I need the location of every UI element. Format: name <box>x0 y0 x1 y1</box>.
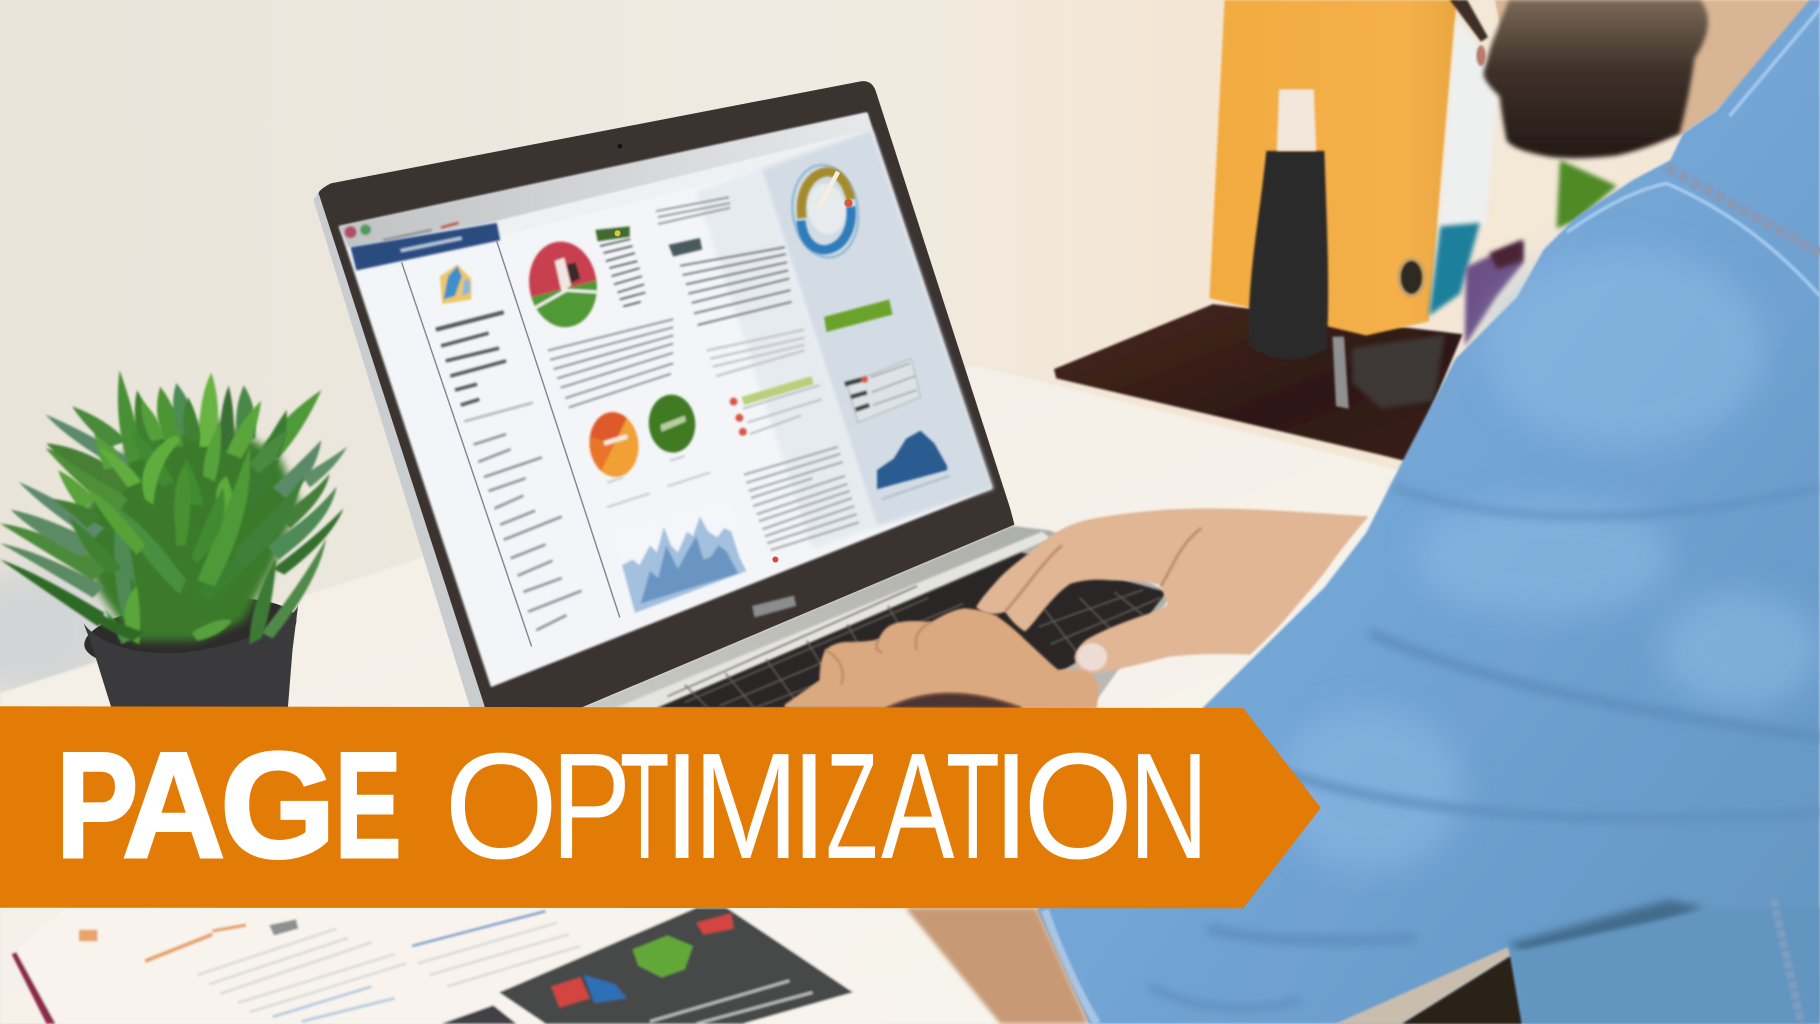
title word: OPTIMIZATION: O <box>1023 720 1133 890</box>
blue donut chart <box>787 161 864 262</box>
book pages <box>12 905 891 1024</box>
green list heading tag <box>595 226 630 241</box>
desk surface <box>0 366 1625 1024</box>
pot rim back <box>80 587 300 678</box>
header caption bar <box>400 238 462 251</box>
green button <box>824 299 893 332</box>
red dot <box>772 556 778 562</box>
caption under mountain chart <box>882 476 949 499</box>
orange heading on book <box>145 925 246 961</box>
title word: OPTIMIZATION: Z <box>826 720 878 890</box>
red book cover edge <box>12 952 56 1024</box>
purple object <box>1465 240 1523 346</box>
orange pie chart <box>588 410 640 478</box>
screen bezel <box>319 81 1014 708</box>
laptop <box>313 81 1172 708</box>
shirt creases <box>1149 488 1820 1008</box>
white binder <box>1439 20 1500 225</box>
screen panel <box>339 113 992 687</box>
title word: OPTIMIZATION: P <box>551 720 631 890</box>
wall shadow at lower left <box>0 569 110 696</box>
paragraph under gauge <box>548 319 673 407</box>
lime progress bar <box>742 376 814 405</box>
webcam <box>618 144 622 149</box>
app icons <box>345 223 458 240</box>
lower shadow band <box>1508 900 1706 969</box>
binder spine ring <box>1399 259 1424 296</box>
middle tinted column <box>696 169 876 549</box>
dark tag on book <box>269 919 298 936</box>
collar fold lines <box>1567 6 1820 296</box>
book text lines <box>197 923 580 1012</box>
title word: OPTIMIZATION <box>444 720 1208 890</box>
banner arrow <box>0 706 1321 908</box>
items on shelf <box>1352 334 1445 409</box>
title word: OPTIMIZATION: M <box>693 720 798 890</box>
foliage mass <box>75 420 299 641</box>
outer leaves <box>0 370 347 638</box>
lower paragraph <box>744 447 859 550</box>
right tinted column <box>760 130 994 527</box>
upper filler leaves <box>52 397 288 528</box>
lower right denim <box>1511 908 1820 1024</box>
black bottle <box>1249 151 1328 359</box>
title word: PAGE: A <box>122 720 225 888</box>
keyboard <box>657 553 1167 708</box>
title: PAGE OPTIMIZATION: E <box>335 720 402 888</box>
title word: OPTIMIZATION: A <box>881 720 954 890</box>
inner leaves <box>70 436 304 644</box>
lips <box>1476 45 1486 66</box>
shelf top <box>1054 304 1462 462</box>
thumbnail <box>1077 643 1107 671</box>
hinge label <box>752 595 796 618</box>
orange binder <box>1209 0 1457 335</box>
red markers with text <box>730 385 822 436</box>
red and green gauge circle <box>527 240 599 329</box>
toolbar strip <box>496 130 875 237</box>
shirt highlights <box>1277 250 1820 871</box>
sidebar logo <box>440 265 471 304</box>
neck and jaw skin <box>1495 0 1820 151</box>
column divider lines <box>402 241 620 647</box>
book orange icon <box>79 930 98 941</box>
silver post <box>1332 337 1349 409</box>
plant in pot <box>0 370 347 708</box>
pot body <box>84 604 298 708</box>
title word: OPTIMIZATION: T <box>946 720 1000 890</box>
beard <box>1483 0 1708 158</box>
background green plant <box>1557 160 1617 229</box>
green cube on book photo <box>633 936 693 977</box>
title: PAGE OPTIMIZATION: N <box>1129 720 1208 890</box>
article paragraph <box>680 247 792 325</box>
shelf with office items <box>1054 0 1617 462</box>
green circle chart <box>647 393 697 454</box>
blue header bar <box>351 223 500 270</box>
knuckle shading on left hand <box>825 622 931 685</box>
checklist lines <box>600 239 645 306</box>
bars box <box>845 359 920 423</box>
right hand <box>976 509 1368 675</box>
window title bar <box>339 113 872 247</box>
dark tag <box>669 238 702 257</box>
title word: PAGE: G <box>220 720 335 888</box>
person <box>1037 0 1820 1024</box>
small data table <box>707 330 804 376</box>
front edge highlight <box>615 532 1050 708</box>
finger separations on right hand <box>1005 528 1201 612</box>
title word: OPTIMIZATION: I <box>663 720 701 890</box>
sidebar navigation list <box>464 403 582 630</box>
area chart <box>622 517 746 613</box>
open book on desk <box>12 905 891 1024</box>
beige wedge at bottom <box>1335 947 1510 1024</box>
denim shirt <box>1037 0 1820 1024</box>
shirt front seam <box>1774 900 1801 1024</box>
yellow dot <box>614 230 621 236</box>
title word: OPTIMIZATION: T <box>620 720 670 890</box>
red and blue shape on book photo <box>551 975 627 1008</box>
light text on book photo <box>650 981 812 1024</box>
title word: OPTIMIZATION: I <box>790 720 828 890</box>
dark blue mountain chart <box>877 431 947 489</box>
bracelet <box>887 694 1021 708</box>
forearm below banner <box>905 908 1089 1024</box>
keyboard key grid <box>667 586 1161 708</box>
article heading lines <box>656 197 730 224</box>
dark book photo panel <box>499 908 853 1024</box>
blue book text <box>273 987 395 1021</box>
lid silver edge <box>313 190 488 708</box>
chart captions <box>607 456 710 507</box>
teal binder <box>1429 223 1480 316</box>
title word: OPTIMIZATION: O <box>444 720 558 890</box>
title word: OPTIMIZATION: I <box>992 720 1030 890</box>
title word: PAGE <box>56 720 402 888</box>
cuff stripe <box>1045 910 1097 1024</box>
hands typing <box>785 509 1368 708</box>
title word: PAGE: P <box>56 720 138 888</box>
blue book heading <box>412 911 546 946</box>
maroon object <box>1489 240 1523 269</box>
sidebar text lines <box>436 312 506 405</box>
area chart panel <box>611 498 751 615</box>
moustache strip <box>1450 0 1488 42</box>
laptop silver base <box>580 526 1172 708</box>
dark furniture at bottom <box>1402 956 1522 1024</box>
red corner tag on book photo <box>696 913 734 934</box>
left hand <box>785 608 1099 708</box>
second dark photo <box>441 1005 517 1024</box>
bottle cap <box>1277 89 1316 151</box>
